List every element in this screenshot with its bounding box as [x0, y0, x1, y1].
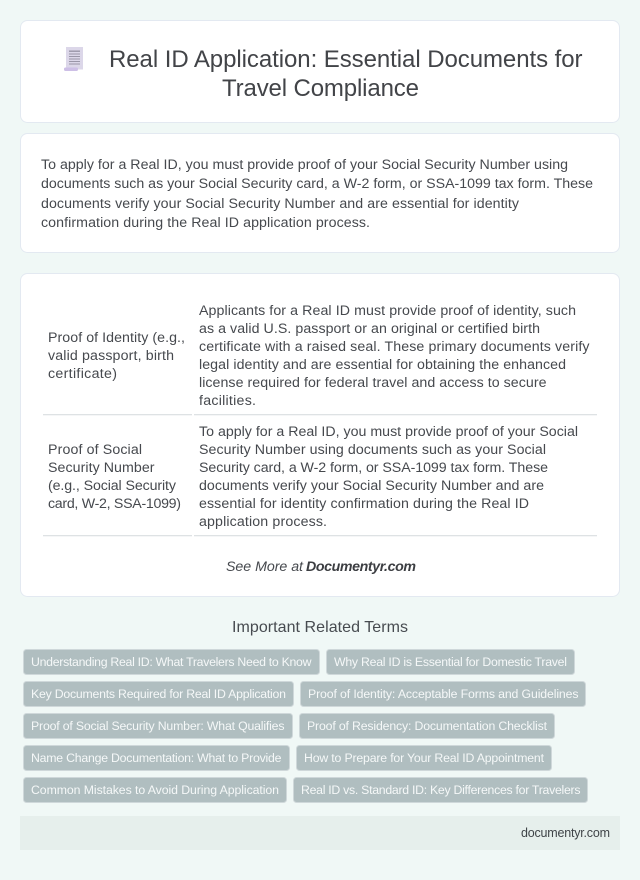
row label: proof of social security number: Security Number	[48, 460, 155, 476]
row label: proof of social security number: card, W-2, SSA-1099)	[48, 496, 181, 512]
chip	[296, 746, 552, 770]
row text: proof of identity: legal identity and are essential for obtaining the enhanced	[199, 357, 566, 373]
intro paragraph: To apply for a Real ID, you must provide proof of your Social Security Number using	[41, 157, 568, 173]
chip	[24, 714, 292, 738]
see more link	[226, 559, 416, 575]
chip: Name Change Documentation: What to Provide	[31, 751, 282, 765]
row label: proof of identity: Proof of Identity (e.g.,	[48, 330, 185, 346]
chip: How to Prepare for Your Real ID Appointment	[304, 751, 545, 765]
chip: Real ID vs. Standard ID: Key Differences for Travelers	[301, 783, 580, 797]
heading: important related terms: Important Related Terms	[232, 619, 408, 636]
row text: proof of identity: license required for federal travel and access to secure	[199, 375, 547, 391]
panel: documents table	[20, 274, 620, 596]
icon: document receipt	[64, 47, 83, 71]
footer bar	[20, 816, 620, 850]
row label: proof of identity: certificate)	[48, 366, 117, 382]
chip: Key Documents Required for Real ID Application	[31, 687, 286, 701]
row text: proof of social security number	[199, 424, 578, 530]
panel: title card	[20, 20, 620, 122]
intro paragraph: confirmation during the Real ID application process.	[41, 215, 370, 231]
row text: proof of identity: Applicants for a Real ID must provide proof of identity, such	[199, 303, 576, 319]
chip: Proof of Social Security Number: What Qualifies	[31, 719, 284, 733]
chip: Proof of Identity: Acceptable Forms and Guidelines	[308, 687, 578, 701]
row text: proof of identity: as a valid U.S. passport or an original or certified birth	[199, 321, 540, 337]
chip	[24, 650, 320, 674]
row label: proof of social security number: Proof of Social	[48, 442, 142, 458]
panel: introduction	[20, 134, 620, 252]
intro paragraph	[41, 157, 593, 231]
intro paragraph: documents verify your Social Security Number and are essential for identity	[41, 196, 520, 212]
row text: proof of social security number: documents verify your Social Security Number and are	[199, 478, 544, 494]
row text: proof of identity	[199, 303, 590, 409]
chip: Common Mistakes to Avoid During Application	[31, 783, 279, 797]
row text: proof of social security number: essential for identity confirmation during the Real ID	[199, 496, 529, 512]
chip	[294, 778, 588, 802]
chip	[24, 682, 294, 706]
row text: proof of identity: certificate with a raised seal. These primary documents verify	[199, 339, 590, 355]
row text: proof of social security number: application process.	[199, 514, 327, 530]
see more link: Documentyr.com	[306, 559, 416, 575]
chip: Why Real ID is Essential for Domestic Travel	[334, 655, 567, 669]
footer site name: documentyr.com	[521, 826, 610, 840]
row label: proof of identity: valid passport, birth	[48, 348, 174, 364]
title: Real ID Application: Essential Documents for	[109, 46, 582, 73]
row label: proof of social security number: (e.g., Social Security	[48, 478, 177, 494]
chip: Proof of Residency: Documentation Checklist	[307, 719, 548, 733]
row text: proof of social security number: To apply for a Real ID, you must provide proof of your Social	[199, 424, 578, 440]
see more link: See More at	[226, 559, 304, 575]
chip	[326, 650, 574, 674]
row text: proof of identity: facilities.	[199, 393, 256, 409]
chip	[300, 682, 586, 706]
chip	[300, 714, 554, 738]
row label: proof of identity	[48, 330, 185, 382]
row text: proof of social security number: Security card, a W-2 form, or SSA-1099 tax form. These	[199, 460, 548, 476]
title: Travel Compliance	[222, 75, 419, 102]
chip	[24, 778, 286, 802]
row label: proof of social security number	[48, 442, 181, 512]
title	[109, 46, 582, 102]
intro paragraph: documents such as your Social Security card, a W-2 form, or SSA-1099 tax form. These	[41, 176, 593, 192]
chip	[24, 746, 290, 770]
related terms chips	[24, 650, 588, 802]
chip: Understanding Real ID: What Travelers Need to Know	[31, 655, 312, 669]
row text: proof of social security number: Security Number using documents such as your Social	[199, 442, 546, 458]
